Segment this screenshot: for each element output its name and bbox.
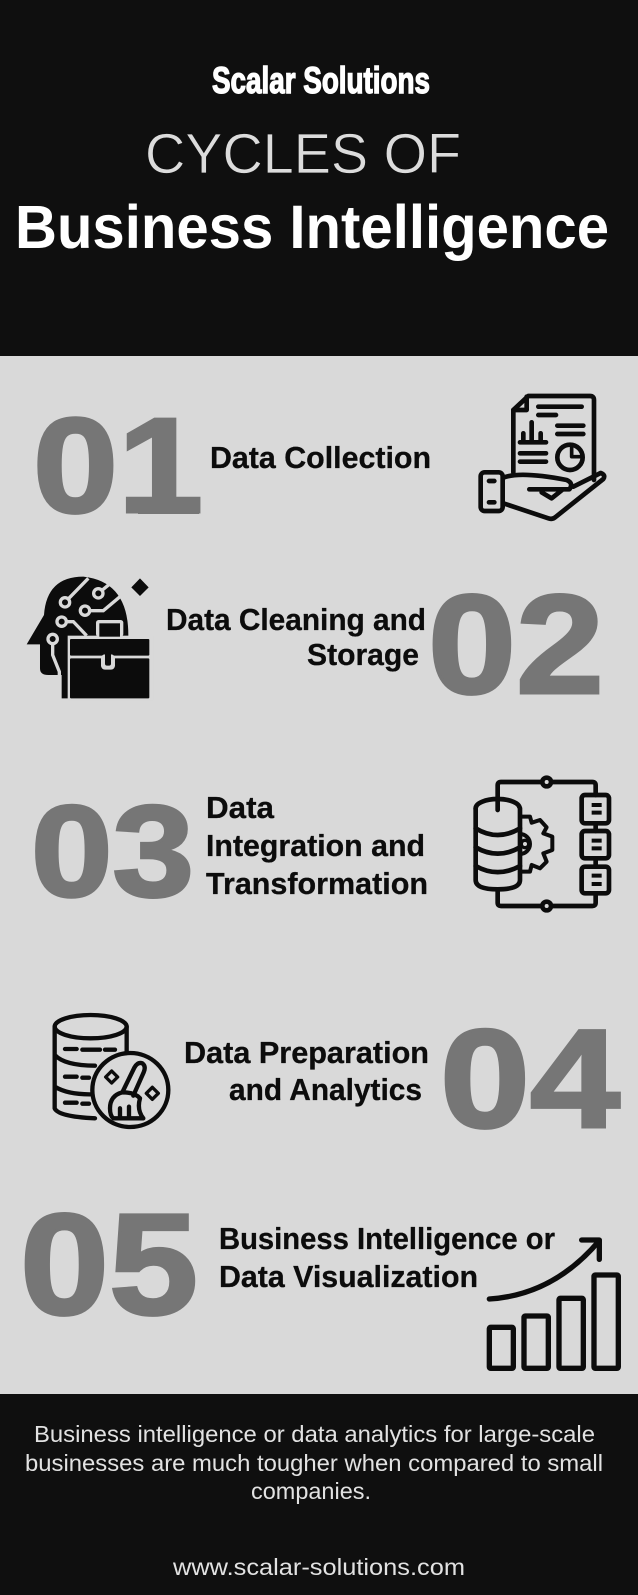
label line 1: Data Preparation (184, 1035, 429, 1070)
step 2 label (166, 602, 426, 672)
step 1 label: Data Collection (210, 440, 431, 475)
label line 1: Business Intelligence or (219, 1221, 555, 1256)
footer description (25, 1421, 603, 1504)
icon: database and gear pipeline (476, 778, 609, 910)
line 1: Business intelligence or data analytics for large-scale (34, 1421, 595, 1447)
step 2 number: 02 (428, 565, 604, 723)
icon: AI head with briefcase (27, 577, 153, 701)
step 5 label (219, 1221, 555, 1294)
icon: database cleaning broom (55, 1015, 168, 1127)
line 3: companies. (251, 1478, 371, 1504)
brand name: Scalar Solutions (212, 60, 430, 101)
label line 3: Transformation (206, 866, 428, 901)
step 4 label (184, 1035, 429, 1107)
label line 1: Data Cleaning and (166, 602, 426, 637)
icon: document on hand (481, 396, 604, 519)
label line 2: and Analytics (229, 1072, 422, 1107)
step 1 number: 01 (33, 390, 203, 541)
icon: growth bar chart with arrow (489, 1240, 618, 1368)
label line 1: Data (206, 790, 275, 825)
footer panel (0, 1394, 638, 1595)
title line: cycles of: CYCLES OF (145, 122, 461, 186)
line 2: businesses are much tougher when compared to small (25, 1450, 603, 1476)
website url: www.scalar-solutions.com (172, 1554, 465, 1580)
label line 2: Integration and (206, 828, 425, 863)
step 4 number: 04 (440, 1000, 620, 1157)
header panel (0, 0, 638, 356)
title line: business intelligence: Business Intelligence (15, 193, 609, 261)
label line 2: Storage (307, 637, 419, 672)
step 3 label (206, 790, 428, 901)
label line 2: Data Visualization (219, 1259, 478, 1294)
step 5 number: 05 (20, 1184, 198, 1345)
step 3 number: 03 (31, 778, 194, 924)
